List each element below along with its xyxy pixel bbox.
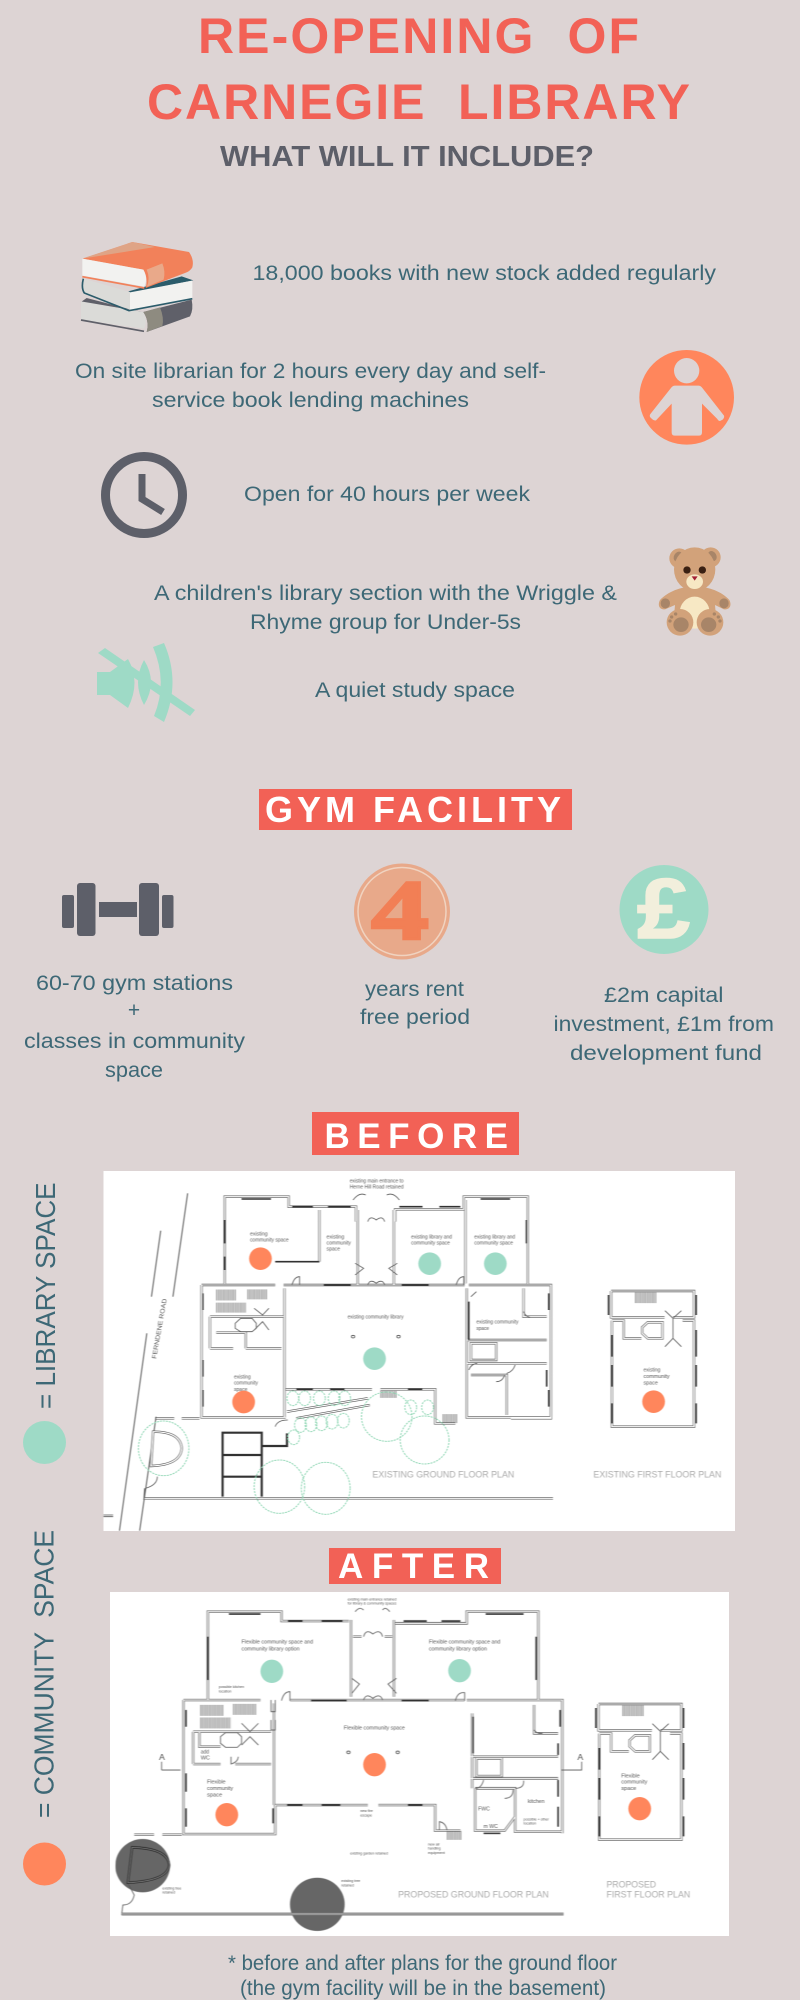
text: capital investment [554,984,774,1065]
room labels: A [159,1753,166,1762]
icon: pound coin: £ [637,862,690,957]
room labels: existing main entrance to [350,1179,404,1184]
room labels: for library & community spaces [348,1601,396,1606]
room labels: community [644,1374,670,1380]
room labels: space [234,1387,247,1393]
text: librarian: service book lending machines [152,389,469,412]
text: librarian [75,360,546,412]
footnote: * before and after plans for the ground floor [228,1952,617,1975]
room labels: existing [234,1375,251,1380]
room labels: existing tree [341,1878,361,1883]
icon: pound coin [620,862,708,957]
room labels [159,1597,647,1895]
icon: teddy bear [659,547,730,636]
room labels: location [524,1821,537,1826]
room labels: retained [162,1890,176,1895]
first floor [609,1291,696,1427]
dark retained trees [115,1839,345,1931]
text: capital investment: development fund [570,1042,762,1065]
room labels: kitchen [528,1799,545,1805]
room labels: space [476,1326,489,1332]
first floor [596,1704,683,1840]
heading: gym facility: GYM FACILITY [265,789,561,830]
text: opening hours: Open for 40 hours per week [244,483,531,506]
plan titles: PROPOSED GROUND FLOOR PLAN [398,1889,549,1900]
text: gym stations: + [128,999,140,1022]
room labels: handling [428,1846,441,1851]
room labels: location [219,1689,232,1693]
room labels [234,1179,670,1393]
space markers [232,1247,665,1413]
title: CARNEGIE LIBRARY [147,74,690,130]
icon: muted speaker [97,643,195,722]
room labels: existing [644,1368,660,1373]
room labels: possible + other [524,1817,549,1821]
title: RE-OPENING OF [198,8,639,64]
text: children's library [154,582,617,634]
room labels: FWC [478,1807,490,1812]
room labels: community space [250,1238,289,1243]
room labels: Flexible community space [344,1726,405,1731]
room labels: equipment [428,1850,446,1855]
plan titles: EXISTING FIRST FLOOR PLAN [593,1470,721,1480]
subtitle: WHAT WILL IT INCLUDE? [220,141,594,173]
room labels: escape [360,1813,373,1817]
footnote [228,1952,617,2000]
room labels: retained [341,1883,354,1887]
room labels: existing main entrance retained [348,1597,397,1601]
room labels: community [327,1241,351,1246]
room labels: existing [327,1235,344,1240]
icon: clock [106,456,182,534]
footnote: (the gym facility will be in the basement) [240,1977,606,2000]
room labels: WC [201,1756,210,1761]
text: librarian: On site librarian for 2 hours every day and self- [75,360,546,383]
room labels: existing [250,1232,268,1237]
room labels: community library option [242,1647,300,1652]
room labels: community [207,1786,233,1792]
legend: library space: = LIBRARY SPACE [30,1182,61,1409]
text: rent free period: years rent [365,978,464,1001]
icon: number 4 coin: 4 [371,862,429,958]
legend: community space: = COMMUNITY SPACE [28,1530,60,1818]
space markers [215,1659,651,1826]
room labels: possible kitchen [219,1684,245,1689]
room labels: new fire [360,1808,373,1813]
road and boundary [103,1193,553,1531]
text: capital investment: investment, £1m from [554,1013,774,1036]
pavilion and boundary [122,1847,564,1914]
room labels: existing library and [411,1235,452,1240]
room labels: existing tree [162,1886,182,1890]
ground floor walls [122,1608,582,1915]
room labels: new air [428,1842,440,1846]
room labels: existing library and [474,1235,515,1240]
text: books: 18,000 books with new stock added regularly [252,262,717,285]
room labels: existing community library [348,1315,404,1320]
plan titles [398,1879,690,1900]
text: gym stations: 60-70 gym stations [36,972,233,995]
heading: before: BEFORE [324,1117,508,1156]
plan titles: PROPOSED [606,1879,656,1890]
room labels: add [201,1750,209,1755]
legend: community space [23,1530,66,1886]
room labels: m WC [484,1824,498,1830]
text: children's library: A children's library section with the Wriggle & [154,582,617,605]
room labels: Flexible [621,1774,640,1779]
room labels: Flexible community space and [242,1640,313,1645]
room labels: space [621,1786,636,1792]
room labels: space [327,1247,340,1252]
text: rent free period [360,978,470,1029]
room labels: existing garden retained [350,1851,389,1856]
text: gym stations: space [105,1059,163,1082]
road and boundary: FERNDENE ROAD [152,1298,169,1359]
icon: stack of books [81,242,193,332]
room labels: community space [411,1241,450,1246]
room labels: existing community [476,1320,519,1325]
text: gym stations [24,972,246,1082]
room labels: space [207,1793,222,1798]
room labels: Herne Hill Road retained [350,1185,404,1190]
plan titles: FIRST FLOOR PLAN [606,1889,690,1900]
plan titles [372,1470,721,1480]
trees [138,1391,449,1514]
heading: after: AFTER [338,1547,489,1586]
text: capital investment: £2m capital [604,984,724,1007]
room labels: community [234,1381,258,1386]
icon: person in circle [639,350,734,445]
title [147,8,690,130]
legend: library space [23,1182,66,1464]
room labels: community space [474,1241,513,1246]
text: rent free period: free period [360,1006,470,1029]
room labels: Flexible community space and [429,1640,500,1645]
room labels: space [644,1381,658,1386]
room labels: Flexible [207,1780,226,1785]
panel: before floor plan [103,1171,735,1531]
room labels: community library option [429,1647,487,1652]
icon: number 4 coin [354,862,450,960]
plan titles: EXISTING GROUND FLOOR PLAN [372,1470,514,1480]
ground floor walls [155,1194,551,1427]
room labels: A [577,1753,584,1762]
icon: dumbbell [62,883,174,936]
panel: after floor plan [110,1592,729,1936]
text: gym stations: classes in community [24,1030,246,1053]
text: quiet study space: A quiet study space [315,679,515,702]
text: children's library: Rhyme group for Under-5s [250,611,521,634]
room labels: community [621,1780,647,1785]
